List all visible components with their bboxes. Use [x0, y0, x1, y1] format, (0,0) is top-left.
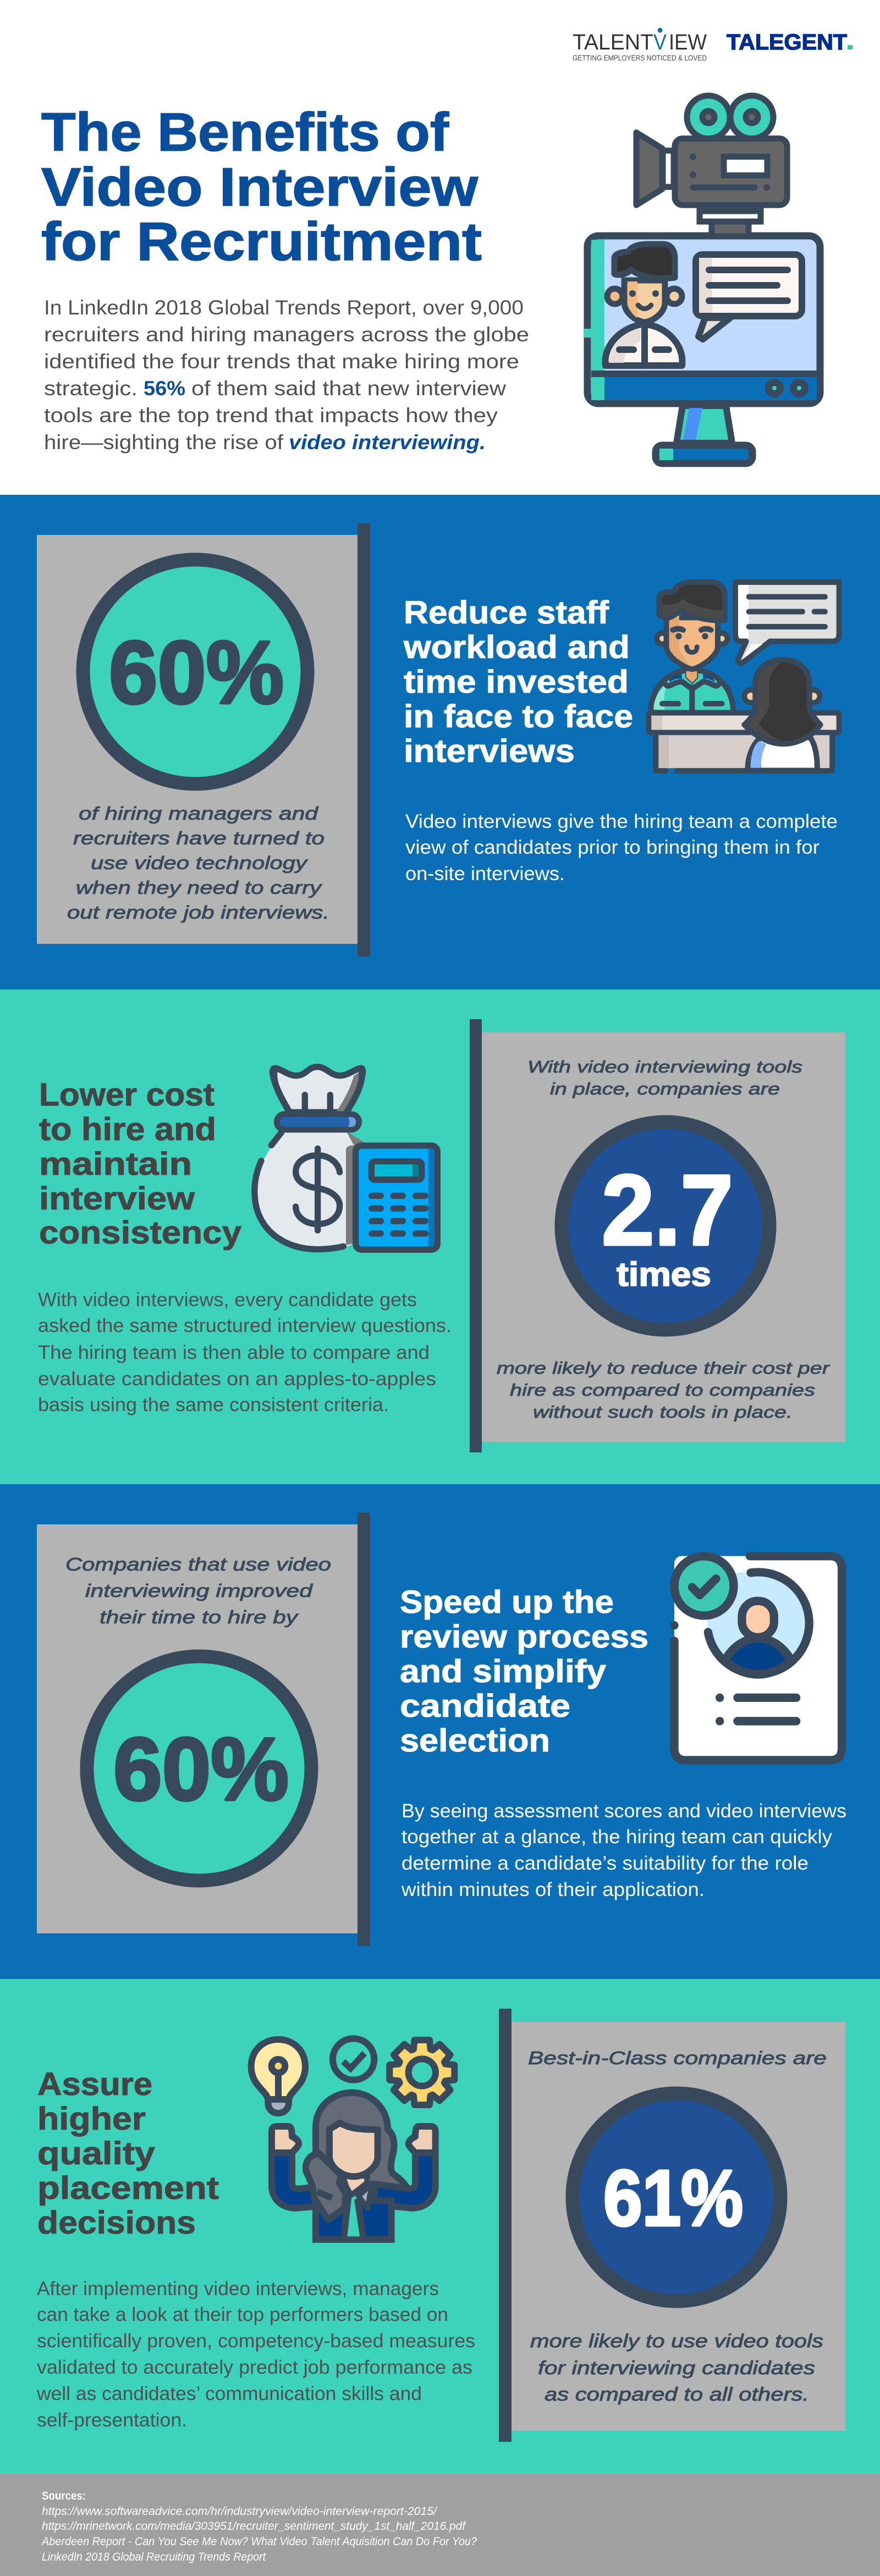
stat caption: of hiring managers and [79, 803, 319, 823]
stat lead-in: their time to hire by [100, 1607, 299, 1627]
stat circle: 61% [603, 2154, 743, 2242]
body text: view of candidates prior to bringing them in for [405, 837, 820, 858]
intro text block: video interviewing. [289, 431, 486, 454]
intro text block: of them said that new interview [191, 377, 506, 400]
body text: together at a glance, the hiring team can quickly [402, 1826, 833, 1848]
stat circle: times [617, 1256, 711, 1293]
icon: candidate profile document [666, 1556, 842, 1760]
stat card: 60 percent time to hire [37, 1513, 370, 1946]
body text: With video interviews, every candidate gets [38, 1289, 417, 1311]
heading [400, 1584, 648, 1759]
title: Video Interview [41, 157, 479, 217]
panel: sources footer: https://mrinetwork.com/media/303951/recruiter_sentiment_study_1st_half_2016.pdf [42, 2520, 466, 2533]
body text: can take a look at their top performers based on [37, 2304, 448, 2325]
stat caption: hire as compared to companies [510, 1380, 815, 1400]
icon: businesswoman with bulb, check and gear [251, 2038, 454, 2240]
stand [676, 406, 732, 443]
title [41, 102, 482, 272]
stat lead-in: interviewing improved [85, 1580, 314, 1601]
stat circle [562, 1122, 769, 1330]
heading: to hire and [39, 1112, 216, 1147]
body text: asked the same structured interview questions. [38, 1315, 452, 1336]
panel: sources footer [41, 2490, 477, 2563]
stat caption: for interviewing candidates [538, 2358, 815, 2379]
stat caption: without such tools in place. [533, 1402, 793, 1422]
heading: decisions [37, 2205, 196, 2241]
heading: time invested [404, 664, 629, 700]
stat lead-in: in place, companies are [550, 1079, 780, 1098]
logo: TalentView: V [653, 30, 667, 54]
stat lead-in: Companies that use video [65, 1554, 331, 1574]
stat caption: recruiters have turned to [73, 828, 324, 848]
title: for Recruitment [41, 211, 482, 272]
stat caption [530, 2331, 823, 2405]
heading: quality [37, 2136, 155, 2171]
heading: interviews [404, 733, 575, 769]
heading: Assure [37, 2066, 152, 2102]
body text: evaluate candidates on an apples-to-apples [38, 1368, 436, 1390]
body text: self-presentation. [37, 2409, 187, 2431]
body text: on-site interviews. [405, 863, 565, 885]
panel: assure higher quality placement [36, 2009, 845, 2442]
body text: well as candidates’ communication skills and [36, 2383, 422, 2404]
body text: The hiring team is then able to compare and [38, 1342, 430, 1363]
panel: speed up review [37, 1513, 846, 1946]
heading: selection [400, 1723, 550, 1759]
icon: interviewer and candidate at desk [648, 582, 839, 771]
stat lead-in [527, 1057, 802, 1098]
logo: TalentView: TALENT [573, 30, 653, 54]
panel: sources footer: LinkedIn 2018 Global Recruiting Trends Report [42, 2551, 266, 2563]
body text: validated to accurately predict job performance as [37, 2357, 472, 2378]
intro text block [44, 296, 529, 454]
stat card: 2.7 times [470, 1019, 845, 1452]
stat caption: as compared to all others. [544, 2384, 809, 2405]
panel: lower cost to hire [38, 1019, 845, 1452]
heading: and simplify [400, 1654, 606, 1689]
heading: maintain [39, 1146, 192, 1182]
heading: in face to face [404, 699, 633, 734]
logo: TalentView [573, 27, 707, 62]
body text: By seeing assessment scores and video interviews [402, 1800, 846, 1822]
body text [38, 1289, 452, 1416]
stat caption [67, 803, 329, 922]
camera [700, 211, 761, 222]
heading: review process [400, 1619, 648, 1655]
stat caption: more likely to reduce their cost per [497, 1358, 831, 1378]
stat caption: use video technology [91, 853, 309, 873]
intro text block: 56% [144, 377, 185, 400]
panel: reduce staff workload [37, 523, 839, 957]
heading [39, 1077, 241, 1251]
stat lead-in: With video interviewing tools [527, 1057, 802, 1076]
body text: within minutes of their application. [401, 1879, 705, 1900]
monitor [587, 236, 820, 403]
intro text block: tools are the top trend that impacts how they [44, 404, 498, 427]
heading: interview [39, 1181, 195, 1217]
panel: sources footer: Aberdeen Report - Can You See Me Now? What Video Talent Aquisition Can Do For You? [41, 2535, 477, 2548]
intro text block: identified the four trends that make hiring more [44, 350, 519, 373]
logo: TalentView: IEW [669, 30, 707, 54]
stat lead-in [65, 1554, 331, 1627]
speech bubble [698, 318, 730, 339]
stat circle: 60% [113, 1720, 289, 1819]
logo: Talegent: TALEGENT [727, 30, 847, 54]
intro text block: strategic. [44, 377, 138, 400]
stat caption: more likely to use video tools [530, 2331, 823, 2352]
body text: scientifically proven, competency-based measures [37, 2330, 475, 2352]
stat circle [83, 560, 307, 784]
panel: header [41, 27, 853, 463]
intro text block: recruiters and hiring managers across the globe [44, 323, 529, 346]
intro text block: In LinkedIn 2018 Global Trends Report, over 9,000 [44, 296, 524, 319]
stat circle [87, 1656, 311, 1881]
heading: Speed up the [400, 1584, 614, 1620]
stat caption: when they need to carry [76, 877, 323, 898]
icon: money bag and calculator [255, 1067, 437, 1250]
stat lead-in: Best-in-Class companies are [528, 2048, 827, 2068]
heading: placement [37, 2170, 219, 2206]
stat caption [497, 1358, 831, 1422]
body text: determine a candidate’s suitability for the role [402, 1853, 809, 1874]
body text: basis using the same consistent criteria. [38, 1394, 389, 1416]
heading: candidate [400, 1688, 570, 1724]
person [607, 289, 623, 304]
body text: After implementing video interviews, managers [37, 2278, 439, 2299]
icon: video camera on monitor [584, 96, 820, 463]
heading: Lower cost [39, 1077, 215, 1113]
stat circle: 60% [109, 623, 284, 722]
stat card: 60 percent [37, 523, 370, 957]
heading [403, 595, 633, 769]
heading: higher [37, 2101, 146, 2137]
panel: sources footer: https://www.softwareadvice.com/hr/industryview/video-interview-report-2015/ [42, 2505, 438, 2518]
stat circle: 2.7 [602, 1154, 733, 1266]
heading: workload and [403, 629, 630, 665]
title: The Benefits of [41, 102, 449, 162]
body text [36, 2278, 475, 2431]
intro text block: hire—sighting the rise of [44, 431, 284, 454]
body text [401, 1800, 846, 1900]
heading [37, 2066, 219, 2241]
heading: Reduce staff [404, 595, 609, 631]
body text [405, 811, 838, 885]
heading: consistency [39, 1215, 241, 1251]
panel: sources footer: Sources: [42, 2490, 86, 2502]
logo: TalentView: GETTING EMPLOYERS NOTICED & LOVED [573, 53, 707, 62]
body text: Video interviews give the hiring team a complete [405, 811, 838, 832]
stat card: 61 percent [499, 2009, 845, 2442]
stat circle [573, 2093, 780, 2301]
stat caption: out remote job interviews. [67, 902, 329, 922]
